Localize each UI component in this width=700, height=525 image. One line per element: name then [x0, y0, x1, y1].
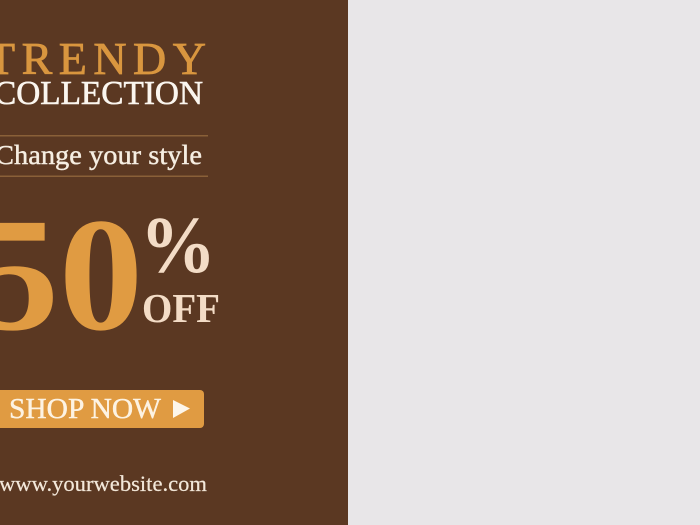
- panel: right grey area: [348, 0, 700, 525]
- heading: COLLECTION: COLLECTION: [0, 75, 203, 112]
- tagline with rules: Change your style: [0, 140, 202, 170]
- percent sign: %: [140, 202, 216, 290]
- button: shop now: [0, 390, 204, 428]
- website url: www.yourwebsite.com: [0, 471, 207, 496]
- icon: play arrow: [173, 400, 190, 418]
- panel: brown promo panel: [0, 0, 348, 525]
- button: shop now: SHOP NOW: [9, 394, 162, 425]
- OFF label: OFF: [142, 285, 220, 331]
